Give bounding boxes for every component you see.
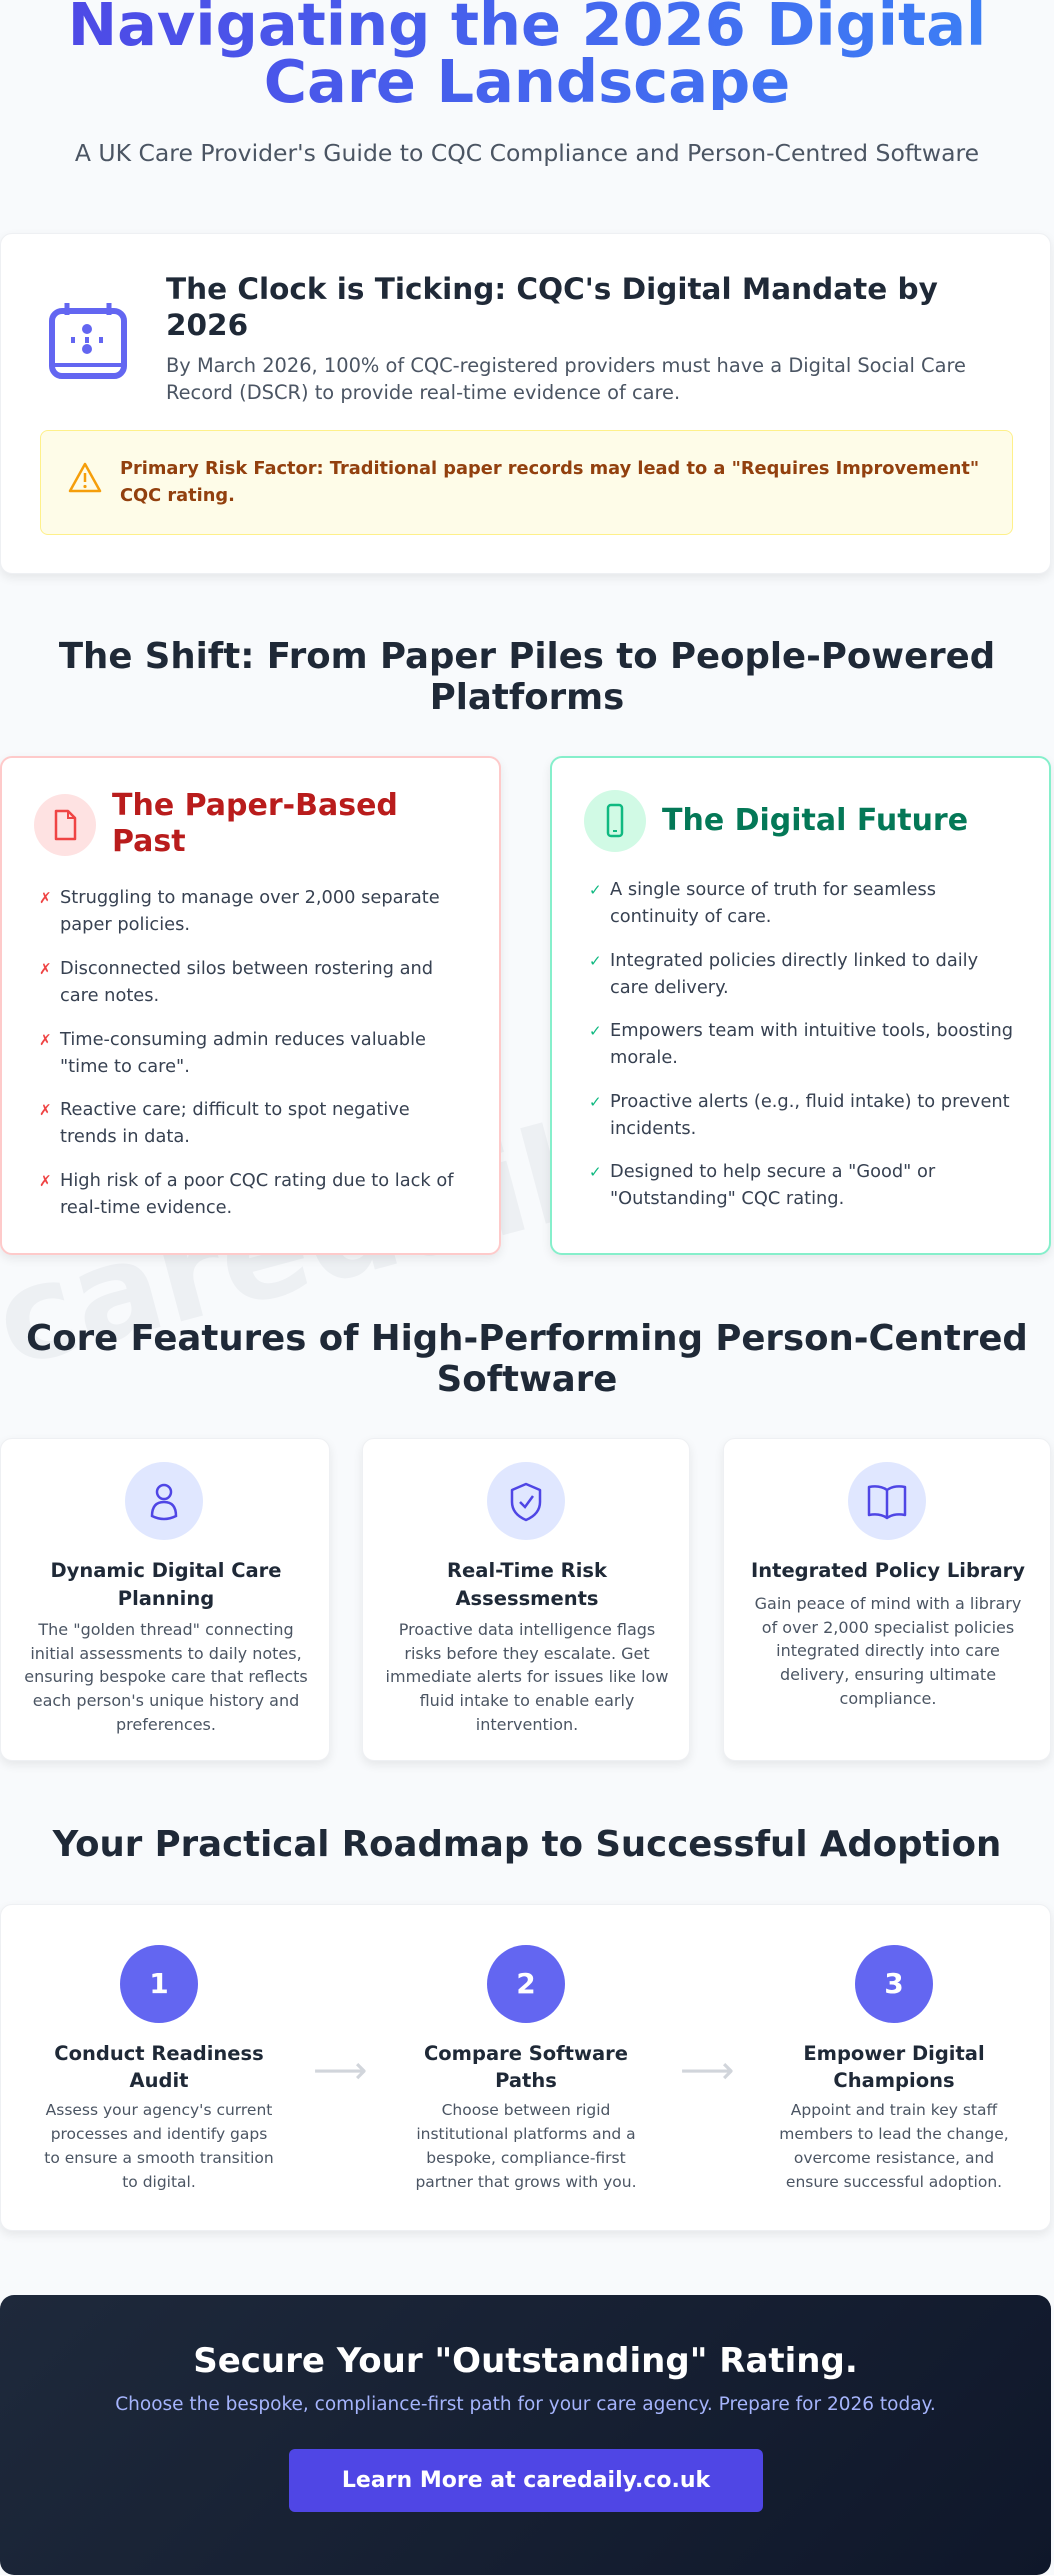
cta heading: Secure Your "Outstanding" Rating. — [193, 2341, 858, 2381]
heading: paper-based past: The Paper-Based — [112, 788, 398, 823]
list: paper problems: Struggling to manage over 2,000 separate paper policies. — [60, 887, 440, 935]
panel: roadmap — [0, 1904, 1051, 2231]
panel: digital future: ✓ — [589, 1022, 602, 1040]
heading: the shift: Platforms — [430, 677, 624, 718]
heading: roadmap: Your Practical Roadmap to Successful Adoption — [53, 1824, 1001, 1865]
step 1: Assess your agency's current processes and identify gaps to ensure a smooth transition to digital. — [44, 2101, 274, 2191]
list: paper problems: Disconnected silos between rostering and care notes. — [60, 958, 433, 1006]
step 1: 1 — [149, 1967, 169, 2000]
icon: person — [125, 1462, 203, 1540]
title: Real-Time Risk Assessments — [447, 1559, 607, 1610]
title: Integrated Policy Library — [751, 1559, 1025, 1582]
list: digital benefits: Proactive alerts (e.g., fluid intake) to prevent incidents. — [610, 1091, 1010, 1139]
text: The "golden thread" connecting initial assessments to daily notes, ensuring bespoke care that reflects each person's unique history and preferences. — [24, 1620, 308, 1734]
heading: paper-based past — [112, 788, 398, 859]
panel: paper past: ✗ — [39, 1031, 52, 1049]
heading: the shift — [59, 636, 995, 718]
heading: core features: Software — [437, 1359, 617, 1400]
list: digital benefits: Integrated policies directly linked to daily care delivery. — [610, 950, 978, 998]
panel: digital future — [550, 756, 1051, 1255]
panel: paper past: ✗ — [39, 889, 52, 907]
arrow: ⟶ — [680, 2048, 734, 2092]
callout: risk — [40, 430, 1013, 535]
panel: digital future: ✓ — [589, 952, 602, 970]
list: paper problems: High risk of a poor CQC rating due to lack of real-time evidence. — [60, 1170, 454, 1218]
watermark: caredaily.c — [0, 1047, 779, 1397]
step 3 — [779, 1945, 1009, 2191]
panel: paper past: ✗ — [39, 960, 52, 978]
button — [289, 2449, 763, 2512]
panel: paper past: ✗ — [39, 1172, 52, 1190]
list: paper problems: Reactive care; difficult to spot negative trends in data. — [60, 1099, 410, 1147]
text: Proactive data intelligence flags risks before they escalate. Get immediate alerts for issues like low fluid intake to enable early intervention. — [386, 1620, 668, 1734]
step 2: Compare Software Paths — [424, 2042, 628, 2092]
icon: warning — [68, 462, 102, 492]
panel: mandate — [0, 233, 1051, 574]
panel: paper past: ✗ — [39, 1101, 52, 1119]
step 1 — [44, 1945, 274, 2191]
step 2: 2 — [516, 1967, 536, 2000]
list: digital benefits: Empowers team with intuitive tools, boosting morale. — [610, 1020, 1013, 1068]
step 3: 3 — [884, 1967, 904, 2000]
title: Care Landscape — [264, 47, 790, 116]
panel: digital future: ✓ — [589, 1093, 602, 1111]
list: paper problems: Time-consuming admin reduces valuable "time to care". — [60, 1029, 426, 1077]
icon: book — [848, 1462, 926, 1540]
icon: shield — [487, 1462, 565, 1540]
panel: call to action — [0, 2295, 1051, 2575]
panel: feature policy library — [723, 1438, 1051, 1761]
step 1: Conduct Readiness Audit — [54, 2042, 264, 2092]
panel: feature care planning — [0, 1438, 330, 1761]
heading: core features: Core Features of High-Performing Person-Centred — [26, 1318, 1028, 1359]
heading: core features — [26, 1318, 1028, 1400]
subtitle: A UK Care Provider's Guide to CQC Compliance and Person-Centred Software — [75, 139, 979, 167]
step 3: Empower Digital Champions — [803, 2042, 985, 2092]
step 3: Appoint and train key staff members to lead the change, overcome resistance, and ensure successful adoption. — [779, 2101, 1009, 2191]
heading: paper-based past: Past — [112, 824, 186, 859]
list: digital benefits — [589, 879, 1013, 1209]
arrow: ⟶ — [313, 2048, 367, 2092]
panel: digital future: ✓ — [589, 881, 602, 899]
icon: document — [34, 794, 96, 856]
list: paper problems — [39, 887, 454, 1218]
text: Gain peace of mind with a library of over 2,000 specialist policies integrated directly into care delivery, ensuring ultimate compliance. — [755, 1594, 1021, 1708]
list: digital benefits: Designed to help secure a "Good" or "Outstanding" CQC rating. — [610, 1161, 935, 1209]
text: risk: Primary Risk Factor: Traditional paper records may lead to a "Requires Improvement" CQC rating. — [120, 458, 979, 506]
heading: the shift: The Shift: From Paper Piles to People-Powered — [59, 636, 995, 677]
heading: clock is ticking: The Clock is Ticking: CQC's Digital Mandate by 2026 — [166, 272, 938, 342]
cta text: Choose the bespoke, compliance-first path for your care agency. Prepare for 2026 today. — [115, 2394, 936, 2415]
panel: paper past — [0, 756, 501, 1255]
title — [0, 0, 1054, 110]
icon: phone — [584, 790, 646, 852]
panel: digital future: ✓ — [589, 1163, 602, 1181]
icon: calendar — [49, 303, 127, 379]
step 2: Choose between rigid institutional platforms and a bespoke, compliance-first partner that grows with you. — [415, 2101, 637, 2191]
title: Dynamic Digital Care Planning — [50, 1559, 282, 1610]
step 2 — [415, 1945, 637, 2191]
panel: feature risk — [362, 1438, 690, 1761]
text: mandate: By March 2026, 100% of CQC-registered providers must have a Digital Social Care Record (DSCR) to provide real-time evidence of care. — [166, 354, 966, 404]
button: Learn More at caredaily.co.uk — [342, 2468, 710, 2493]
heading: digital future: The Digital Future — [662, 803, 968, 838]
list: digital benefits: A single source of truth for seamless continuity of care. — [610, 879, 936, 927]
